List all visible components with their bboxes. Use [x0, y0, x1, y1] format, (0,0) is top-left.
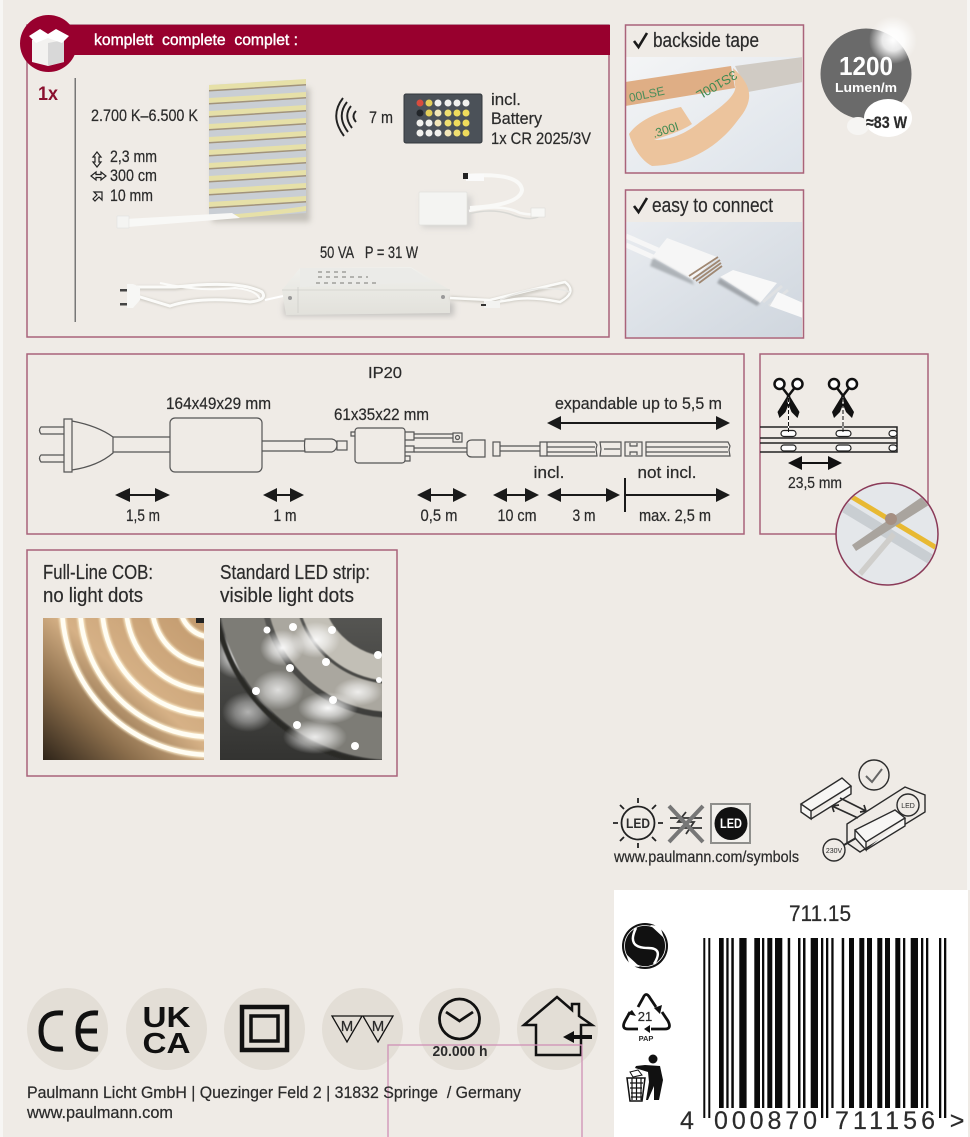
- photo: adhesive tape: 3S100L: [694, 67, 740, 103]
- caption: standard strip: [220, 562, 370, 607]
- length labels: 3 m: [572, 507, 596, 525]
- header bar: [27, 25, 610, 55]
- panel: barcode area: [614, 890, 968, 1137]
- caption: full-line COB: no light dots: [43, 585, 143, 607]
- icon: recycling PAP 21: [624, 994, 669, 1043]
- icon: double insulation: [224, 988, 305, 1070]
- photo: cutting strip: [836, 483, 950, 585]
- icon: driver replacement diagram: 230V: [826, 848, 842, 855]
- icon: lumen badge: Lumen/m: [835, 80, 897, 95]
- wiring schematic: [40, 418, 730, 472]
- panel: cutting guide: [760, 354, 950, 585]
- certification row: [27, 988, 598, 1070]
- barcode digits: 000870: [714, 1107, 817, 1135]
- length labels: 1 m: [274, 507, 296, 525]
- symbols link: www.paulmann.com/symbols: [613, 849, 799, 866]
- photo: adhesive tape: [625, 57, 803, 173]
- panel: wiring diagram IP20: 61x35x22 mm: [334, 406, 429, 424]
- battery note: [491, 90, 592, 148]
- icon: lumen badge: 1200: [839, 51, 893, 81]
- icon: lifetime clock: 20.000 h: [432, 1043, 488, 1060]
- photo: receiver module: [419, 173, 545, 228]
- strip dimensions: 2,3 mm: [110, 147, 157, 166]
- barcode digits: >: [950, 1107, 964, 1135]
- icon: recycling PAP 21: PAP: [639, 1034, 653, 1043]
- rating label: IP20: [368, 365, 402, 382]
- icon: lifetime clock: [419, 988, 500, 1070]
- icon: LED box: LED: [720, 816, 742, 831]
- caption: full-line COB: [43, 562, 153, 607]
- check heading: easy to connect: [652, 195, 773, 217]
- strip dimensions: 10 mm: [110, 186, 153, 205]
- photo: connector: [625, 222, 803, 338]
- length labels: [126, 464, 711, 525]
- barcode digits: [680, 1107, 964, 1135]
- icon: box badge: [20, 15, 77, 72]
- length labels: 0,5 m: [420, 507, 458, 525]
- photo: LED strip coil: [117, 79, 310, 228]
- icon: UKCA mark: CA: [142, 1028, 191, 1060]
- icon: driver replacement diagram: LED: [901, 803, 915, 810]
- icon: green dot: [622, 923, 668, 969]
- icon: tidy man: [627, 1054, 663, 1101]
- check heading: backside tape: [653, 30, 759, 52]
- panel: complete set contents: [20, 15, 610, 337]
- icon: recycling PAP 21: 21: [638, 1009, 652, 1024]
- strip dimensions: [91, 147, 157, 205]
- icon: lumen badge: [820, 16, 917, 137]
- barcode digits: 711156: [835, 1107, 935, 1135]
- icon: UKCA mark: UK: [142, 1002, 191, 1034]
- icon: scissors left: [774, 379, 802, 433]
- company address: [26, 1084, 522, 1122]
- icon: scissors right: [829, 379, 857, 433]
- barcode digits: 4: [680, 1107, 694, 1135]
- symbol row: LED icons: [613, 798, 799, 866]
- icon: driver replacement diagram: [801, 760, 925, 861]
- barcode bars: [703, 938, 946, 1118]
- caption: standard strip: Standard LED strip:: [220, 562, 370, 584]
- strip dimensions: 300 cm: [110, 166, 157, 185]
- icon: LED sun: [613, 798, 663, 848]
- strip schematic: [760, 427, 897, 452]
- panel: easy to connect: [625, 190, 804, 338]
- length labels: 1,5 m: [126, 507, 160, 525]
- company address: Paulmann Licht GmbH | Quezinger Feld 2 | 31832 Springe / Germany: [27, 1084, 522, 1102]
- company address: www.paulmann.com: [26, 1104, 173, 1122]
- icon: crossed dimmer: [669, 806, 703, 842]
- caption: full-line COB: Full-Line COB:: [43, 562, 153, 584]
- icon: lumen badge: ≈83 W: [866, 113, 908, 132]
- remote range: 7 m: [369, 108, 393, 127]
- length labels: not incl.: [638, 464, 696, 482]
- icon: MM triangles: M: [341, 1018, 353, 1035]
- icon: indoor use house: [517, 988, 598, 1070]
- dimension labels: 164x49x29 mm: [166, 395, 271, 413]
- panel: backside tape: [625, 25, 804, 173]
- spacing label: 23,5 mm: [788, 475, 842, 492]
- photo: driver with mains cable: [120, 267, 570, 316]
- caption: standard strip: visible light dots: [220, 585, 354, 607]
- photo: standard LED strip: [220, 618, 382, 760]
- battery note: 1x CR 2025/3V: [491, 129, 592, 148]
- driver rating: 50 VA P = 31 W: [320, 243, 418, 262]
- panel: wiring diagram IP20: expandable up to 5,5 m: [555, 395, 722, 413]
- icon: MM triangles: [322, 988, 403, 1070]
- icon: UKCA mark: [126, 988, 207, 1070]
- photo: adhesive tape: 00LSE: [628, 84, 666, 105]
- colour temperature: 2.700 K–6.500 K: [91, 106, 199, 125]
- photo: adhesive tape: .300I: [651, 119, 680, 141]
- photo: remote control: [404, 94, 482, 143]
- length labels: 10 cm: [498, 507, 536, 525]
- icon: MM triangles: M: [372, 1018, 384, 1035]
- icon: CE mark: [27, 988, 108, 1070]
- article number: 711.15: [789, 901, 851, 926]
- spacing arrow: [788, 456, 842, 470]
- panel: COB vs standard: [26, 549, 398, 777]
- icon: LED sun: LED: [626, 815, 650, 831]
- photo: COB strip: [43, 618, 204, 760]
- overlay frame: [388, 1045, 582, 1137]
- length labels: incl.: [534, 464, 564, 482]
- length arrows: [115, 416, 730, 512]
- heading: complete: komplett complete complet :: [94, 32, 298, 49]
- battery note: Battery: [491, 109, 542, 128]
- panel: wiring diagram IP20: [27, 354, 744, 534]
- icon: wireless waves: [336, 98, 356, 136]
- battery note: incl.: [491, 90, 521, 109]
- length labels: max. 2,5 m: [639, 507, 711, 525]
- icon: LED box: [711, 804, 750, 843]
- quantity label: 1x: [38, 84, 58, 105]
